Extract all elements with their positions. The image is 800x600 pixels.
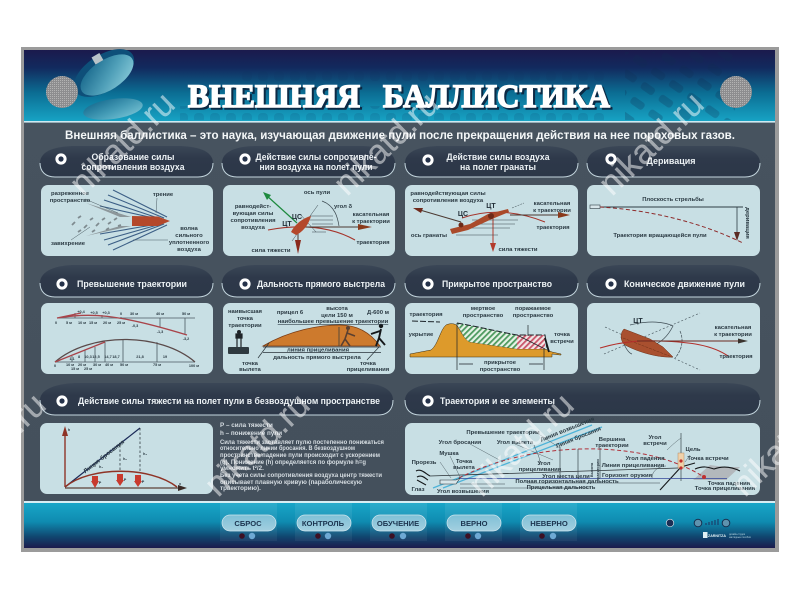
heading pill: Действие силы воздуха <box>446 152 550 163</box>
diagram card: Точка встречи <box>687 456 729 462</box>
diagram card: 25 м <box>117 321 125 325</box>
heading pill: Коническое движение пули <box>624 279 745 290</box>
diagram card: поражаемое <box>515 306 552 312</box>
control button: верно: ВЕРНО <box>460 519 488 528</box>
text block: gravity explanation: (g). Понижение (h) определяется по формуле h=g <box>220 459 366 466</box>
diagram card: линия прицеливания <box>287 348 350 354</box>
watermarks: nikatd.ru <box>62 85 182 203</box>
panel: conical bullet motion <box>587 265 760 374</box>
diagram card: 18,7 <box>112 355 120 359</box>
diagram card: прицеливания <box>347 367 390 373</box>
diagram card: завихрение <box>51 241 86 247</box>
title: ВНЕШНЯЯ <box>188 79 360 115</box>
poster frame <box>21 47 779 552</box>
diagram card <box>405 185 578 256</box>
control button: обучение: ОБУЧЕНИЕ <box>377 519 419 528</box>
diagram card: сила тяжести <box>499 247 538 253</box>
title: БАЛЛИСТИКА <box>385 81 612 117</box>
diagram card: к траектории <box>533 208 571 214</box>
diagram card: пространство <box>513 313 554 319</box>
icon: lenses <box>66 39 144 123</box>
diagram card: равнодействующая силы <box>410 190 486 197</box>
diagram card: Линия прицеливания <box>602 463 665 469</box>
diagram card: 20 м <box>78 363 86 367</box>
diagram card: 10 м <box>78 321 86 325</box>
panel: trajectory elements <box>405 383 760 495</box>
footer controls and logo: ZARNITZA <box>708 534 726 538</box>
diagram card: вылета <box>239 367 262 373</box>
diagram card: разреженное <box>51 191 90 197</box>
diagram card: Плоскость стрельбы <box>642 196 704 203</box>
diagram card: 14,7 <box>104 355 112 359</box>
heading pill <box>405 383 760 415</box>
diagram card: касательная <box>353 212 390 218</box>
heading pill <box>40 383 393 415</box>
diagram card: Цель <box>685 447 701 453</box>
diagram card: Глаз <box>411 487 425 493</box>
diagram card: Точка прицеливания <box>695 486 756 492</box>
diagram card: пространство <box>480 367 521 373</box>
panel: covered space <box>405 265 578 374</box>
diagram card: +0,4 <box>77 310 86 314</box>
diagram card: x <box>179 482 182 486</box>
diagram card: 75 м <box>153 363 161 367</box>
heading pill: Превышение траектории <box>77 279 187 290</box>
diagram card: деривация <box>744 207 750 239</box>
diagram card: 40 м <box>105 363 113 367</box>
diagram card <box>405 303 578 374</box>
diagram card: 0 <box>54 364 56 368</box>
panel: trajectory elevation <box>40 265 213 374</box>
diagram card: вылета <box>453 465 476 471</box>
diagram card: 100 м <box>189 364 199 368</box>
diagram card: 5 м <box>66 321 72 325</box>
diagram card: точка <box>360 361 377 367</box>
diagram card: сопротивления воздуха <box>413 198 484 204</box>
footer controls and logo: дизайн-студия <box>729 533 746 536</box>
control button: контроль: КОНТРОЛЬ <box>302 519 345 528</box>
diagram card: 19 <box>163 355 167 359</box>
diagram card <box>587 185 760 256</box>
text block: gravity explanation: h – понижение пули <box>220 430 282 437</box>
diagram card: Траектория вращающейся пули <box>613 232 707 239</box>
diagram card: наивысшая <box>228 309 263 315</box>
poster body background <box>24 121 775 503</box>
watermarks: nikatd.ru <box>461 386 581 504</box>
diagram card: к траектории <box>714 332 752 338</box>
diagram card: Мушка <box>439 451 459 457</box>
diagram card: h₃ <box>143 452 147 456</box>
heading pill <box>405 146 578 177</box>
diagram card: уплотненного <box>169 240 210 246</box>
heading pill <box>587 146 760 177</box>
diagram card: -3,2 <box>183 337 189 341</box>
diagram card: Угол бросания <box>439 439 482 446</box>
diagram card <box>223 185 395 256</box>
heading pill: Образование силы <box>92 152 174 163</box>
diagram card: укрытие <box>409 332 434 338</box>
watermarks: nikatd.ru <box>326 85 446 203</box>
heading pill: Дальность прямого выстрела <box>257 279 386 290</box>
diagram card: траектория <box>719 354 753 360</box>
watermarks: nikatd.ru <box>197 386 317 504</box>
diagram card: наибольшее превышение траектории <box>278 318 389 325</box>
title: БАЛЛИСТИКА <box>383 79 610 115</box>
diagram card: прицеливания <box>519 467 562 473</box>
diagram card: ЦТ <box>633 318 643 325</box>
text block: gravity explanation: описывает плавную кривую (параболическую <box>220 478 363 486</box>
diagram card: воздуха <box>177 247 202 253</box>
diagram card: траектория <box>536 225 570 231</box>
diagram card: Линия бросания <box>555 425 603 450</box>
heading pill <box>40 265 213 297</box>
panel: air force on grenade <box>405 146 578 256</box>
diagram card <box>41 303 213 374</box>
diagram card: Угол возвышения <box>437 489 490 495</box>
diagram card: высота <box>326 306 348 312</box>
diagram card: вующая силы <box>233 211 273 217</box>
text block: gravity explanation: Сила тяжести заставляет пулю постепенно понижаться <box>220 439 384 446</box>
diagram card: равнодейст- <box>235 203 271 210</box>
diagram card <box>41 185 213 256</box>
panel: derivation <box>587 146 760 256</box>
diagram card: прицел 6 <box>277 310 304 316</box>
text block: gravity explanation: Р – сила тяжести <box>220 422 273 429</box>
watermarks <box>0 85 800 504</box>
diagram card <box>40 423 213 494</box>
diagram card: 25 м <box>84 367 92 371</box>
diagram card: угол δ <box>334 204 352 210</box>
diagram card: 15 м <box>71 367 79 371</box>
diagram card: Высота <box>590 462 594 477</box>
diagram card: P <box>99 481 102 485</box>
diagram card: 10,3 <box>84 355 92 359</box>
diagram card: 12,5 <box>92 355 100 359</box>
diagram card: сильного <box>175 233 203 239</box>
text block: gravity explanation: траекторию). <box>220 485 261 492</box>
diagram card: касательная <box>534 201 571 207</box>
heading pill: на полет гранаты <box>460 162 536 173</box>
heading pill <box>40 146 213 177</box>
diagram card: Полная горизонтальная дальность <box>515 479 619 485</box>
diagram card: +0,3 <box>102 311 110 315</box>
diagram card: Превышение траектории <box>466 430 540 436</box>
control button: контроль <box>295 503 352 541</box>
diagram card: Вершина <box>599 437 626 443</box>
diagram card: касательная <box>715 325 752 331</box>
diagram card: траектории <box>595 443 629 449</box>
text block: gravity explanation: Без учета силы сопротивления воздуха центр тяжести <box>220 472 382 479</box>
diagram card: ЦС <box>292 214 302 221</box>
heading pill: Траектория и ее элементы <box>440 396 555 407</box>
diagram card: Угол <box>537 461 551 467</box>
diagram card: встречи <box>643 441 667 447</box>
diagram card: точка <box>237 316 254 322</box>
footer band <box>24 501 775 548</box>
heading pill: сопротивления воздуха <box>82 162 185 173</box>
panel: air resistance formation <box>40 146 213 256</box>
diagram card: встречи <box>550 339 574 345</box>
panel: gravity in vacuum <box>40 383 393 494</box>
diagram card: точка <box>554 332 571 338</box>
heading pill <box>405 265 578 297</box>
heading pill: ния воздуха на полет пули <box>260 162 373 173</box>
intro text: Внешняя баллистика – это наука, изучающая движение пули после прекращения действия на нее пороховых газов. <box>65 128 735 142</box>
diagram card: пространство <box>463 313 504 319</box>
diagram card: -0,3 <box>132 324 138 328</box>
text block: gravity explanation: умножить t²/2. <box>220 465 264 472</box>
heading pill: Действие силы тяжести на полет пули в безвоздушном пространстве <box>78 396 380 407</box>
diagram card: Линия возвышения <box>540 416 596 444</box>
diagram card: Прорезь <box>412 460 437 466</box>
diagram card <box>587 303 760 374</box>
watermarks: nikatd.ru <box>591 85 711 203</box>
diagram card: к траектории <box>352 219 390 225</box>
diagram card: точка <box>242 361 259 367</box>
diagram card: мертвое <box>471 306 496 312</box>
diagram card: 15 м <box>89 321 97 325</box>
diagram card: воздуха <box>241 225 266 231</box>
diagram card: h₂ <box>123 457 127 461</box>
diagram card: цели 150 м <box>321 313 353 319</box>
footer controls and logo: наглядные пособия <box>729 536 751 539</box>
diagram card: h <box>68 428 71 432</box>
diagram card: Горизонт оружия <box>602 473 653 479</box>
diagram card: Угол вылета <box>497 440 534 446</box>
control button: сброс <box>220 503 277 541</box>
diagram card: P <box>124 478 127 482</box>
diagram card: +0,5 <box>90 311 98 315</box>
control button: неверно <box>520 503 577 541</box>
diagram card: Угол <box>648 435 662 441</box>
diagram card: сила тяжести <box>252 248 291 254</box>
diagram card: траектории <box>228 323 262 329</box>
icon: left speaker mesh <box>46 76 78 108</box>
diagram card <box>223 303 395 374</box>
diagram card: ЦТ <box>282 221 292 228</box>
diagram card: Угол места цели <box>542 474 590 480</box>
diagram card: волна <box>180 226 199 232</box>
diagram card: -1,3 <box>157 330 163 334</box>
diagram card: Точка падения <box>708 481 751 487</box>
control button: неверно: НЕВЕРНО <box>530 519 568 528</box>
diagram card: Д-600 м <box>367 310 389 316</box>
control button: сброс: СБРОС <box>234 519 262 528</box>
diagram card: дальность прямого выстрела <box>273 355 362 361</box>
heading pill <box>222 146 395 177</box>
title: ВНЕШНЯЯ <box>190 81 362 117</box>
panel: air resistance on bullet <box>222 146 395 256</box>
diagram card: пространство <box>50 198 91 204</box>
icon: right speaker mesh <box>720 76 752 108</box>
diagram card: Линия бросания <box>82 438 126 475</box>
diagram card: 0 <box>120 312 122 316</box>
diagram card: траектория <box>356 240 390 246</box>
panel: direct shot range <box>222 265 395 374</box>
heading pill: Действие силы сопротивле- <box>256 152 376 163</box>
text block: gravity explanation: относительно линии бросания. В безвоздушном <box>220 444 355 452</box>
text block: gravity explanation: пространстве падение пули происходит с ускорением <box>220 452 380 459</box>
control button: обучение <box>370 503 427 541</box>
diagram card: 21,8 <box>136 355 144 359</box>
diagram card: сопротивления <box>230 218 276 224</box>
diagram card: 1,1 <box>69 357 75 361</box>
diagram card: 10 м <box>66 363 74 367</box>
diagram card: траектория <box>409 312 443 318</box>
diagram card: ось гранаты <box>411 233 447 239</box>
text block: gravity explanation <box>220 422 384 492</box>
diagram card: 40 м <box>156 312 164 316</box>
heading pill: Деривация <box>646 156 696 167</box>
diagram card: траектории <box>596 459 600 481</box>
diagram card: Точка <box>456 459 473 465</box>
diagram card <box>405 416 760 495</box>
diagram card: Угол падения <box>625 456 665 462</box>
title <box>188 79 612 117</box>
diagram card: ЦТ <box>486 203 496 210</box>
diagram card: 0 <box>55 321 57 325</box>
diagram card: прикрытое <box>484 360 517 366</box>
footer controls and logo <box>666 519 751 539</box>
diagram card: трение <box>153 192 174 198</box>
diagram card: P <box>142 480 145 484</box>
heading pill <box>587 265 760 297</box>
heading pill <box>222 265 395 297</box>
diagram card: 20 м <box>103 321 111 325</box>
diagram card: Прицельная дальность <box>527 485 596 491</box>
heading pill: Прикрытое пространство <box>442 279 552 290</box>
diagram card: ЦС <box>458 211 468 218</box>
header banner <box>24 50 775 123</box>
diagram card: 50 м <box>182 312 190 316</box>
diagram card: 8 <box>78 355 80 359</box>
diagram card: 30 м <box>93 363 101 367</box>
control button: верно <box>445 503 502 541</box>
diagram card: 30 м <box>130 312 138 316</box>
diagram card: h₁ <box>99 465 103 469</box>
diagram card: ось пули <box>304 190 330 196</box>
diagram card: 50 м <box>120 363 128 367</box>
